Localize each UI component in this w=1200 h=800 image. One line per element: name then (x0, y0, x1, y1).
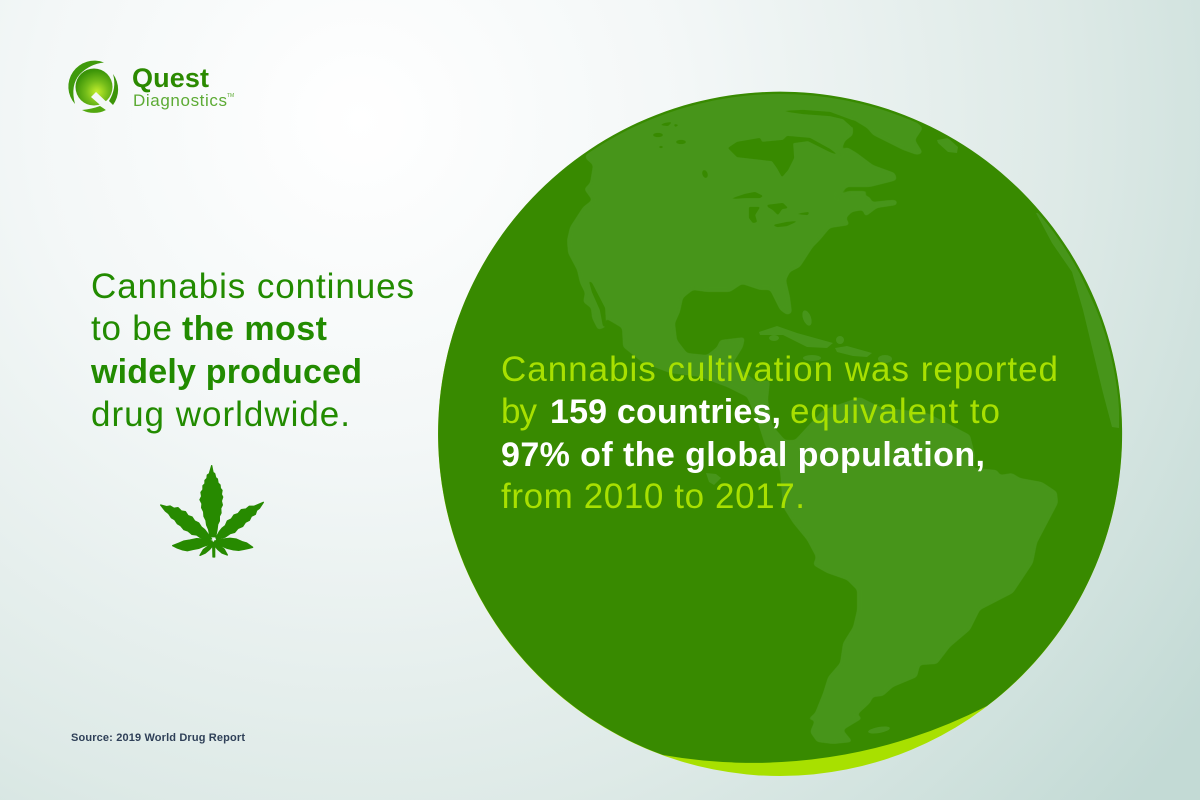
main statement on globe: by (501, 392, 538, 431)
island: Cuba (759, 326, 833, 348)
logo wordmark Diagnostics: Diagnostics (133, 91, 227, 110)
trademark: TM (227, 93, 234, 99)
main statement on globe: equivalent to (790, 392, 1000, 431)
main statement on globe: from 2010 to 2017. (501, 477, 805, 516)
island: Falklands (868, 726, 890, 734)
island: Hispaniola (835, 346, 872, 357)
island: Greenland east (937, 138, 958, 153)
heading: left statement: drug worldwide. (91, 395, 350, 434)
logo wordmark Quest: Quest (132, 63, 209, 93)
globe ocean disc (438, 92, 1122, 763)
lime crescent (438, 92, 1122, 776)
heading: left statement (90, 267, 414, 434)
heading: left statement: widely produced (90, 353, 362, 391)
icon: Quest Q mark (68, 61, 118, 113)
main statement on globe: 159 countries, (550, 393, 781, 431)
logo: Quest Diagnostics (68, 61, 234, 113)
heading: left statement: to be (91, 309, 172, 348)
globe (438, 70, 1122, 776)
icon: cannabis leaf (161, 466, 263, 557)
heading: left statement: the most (182, 310, 327, 348)
source note: Source: 2019 World Drug Report (71, 732, 245, 744)
island: Galapagos (706, 473, 721, 485)
main statement on globe: 97% of the global population, (501, 436, 985, 474)
land on right limb (1036, 213, 1119, 428)
lakes and inland seas (589, 110, 857, 327)
island: Jamaica (769, 335, 779, 341)
heading: left statement: Cannabis continues (91, 267, 414, 306)
island: small Caribbean group (803, 336, 892, 363)
land masses: the Americas (567, 70, 1119, 744)
main statement on globe (501, 350, 1058, 516)
island: Bahamas (802, 310, 812, 326)
main statement on globe: Cannabis cultivation was reported (501, 350, 1058, 389)
